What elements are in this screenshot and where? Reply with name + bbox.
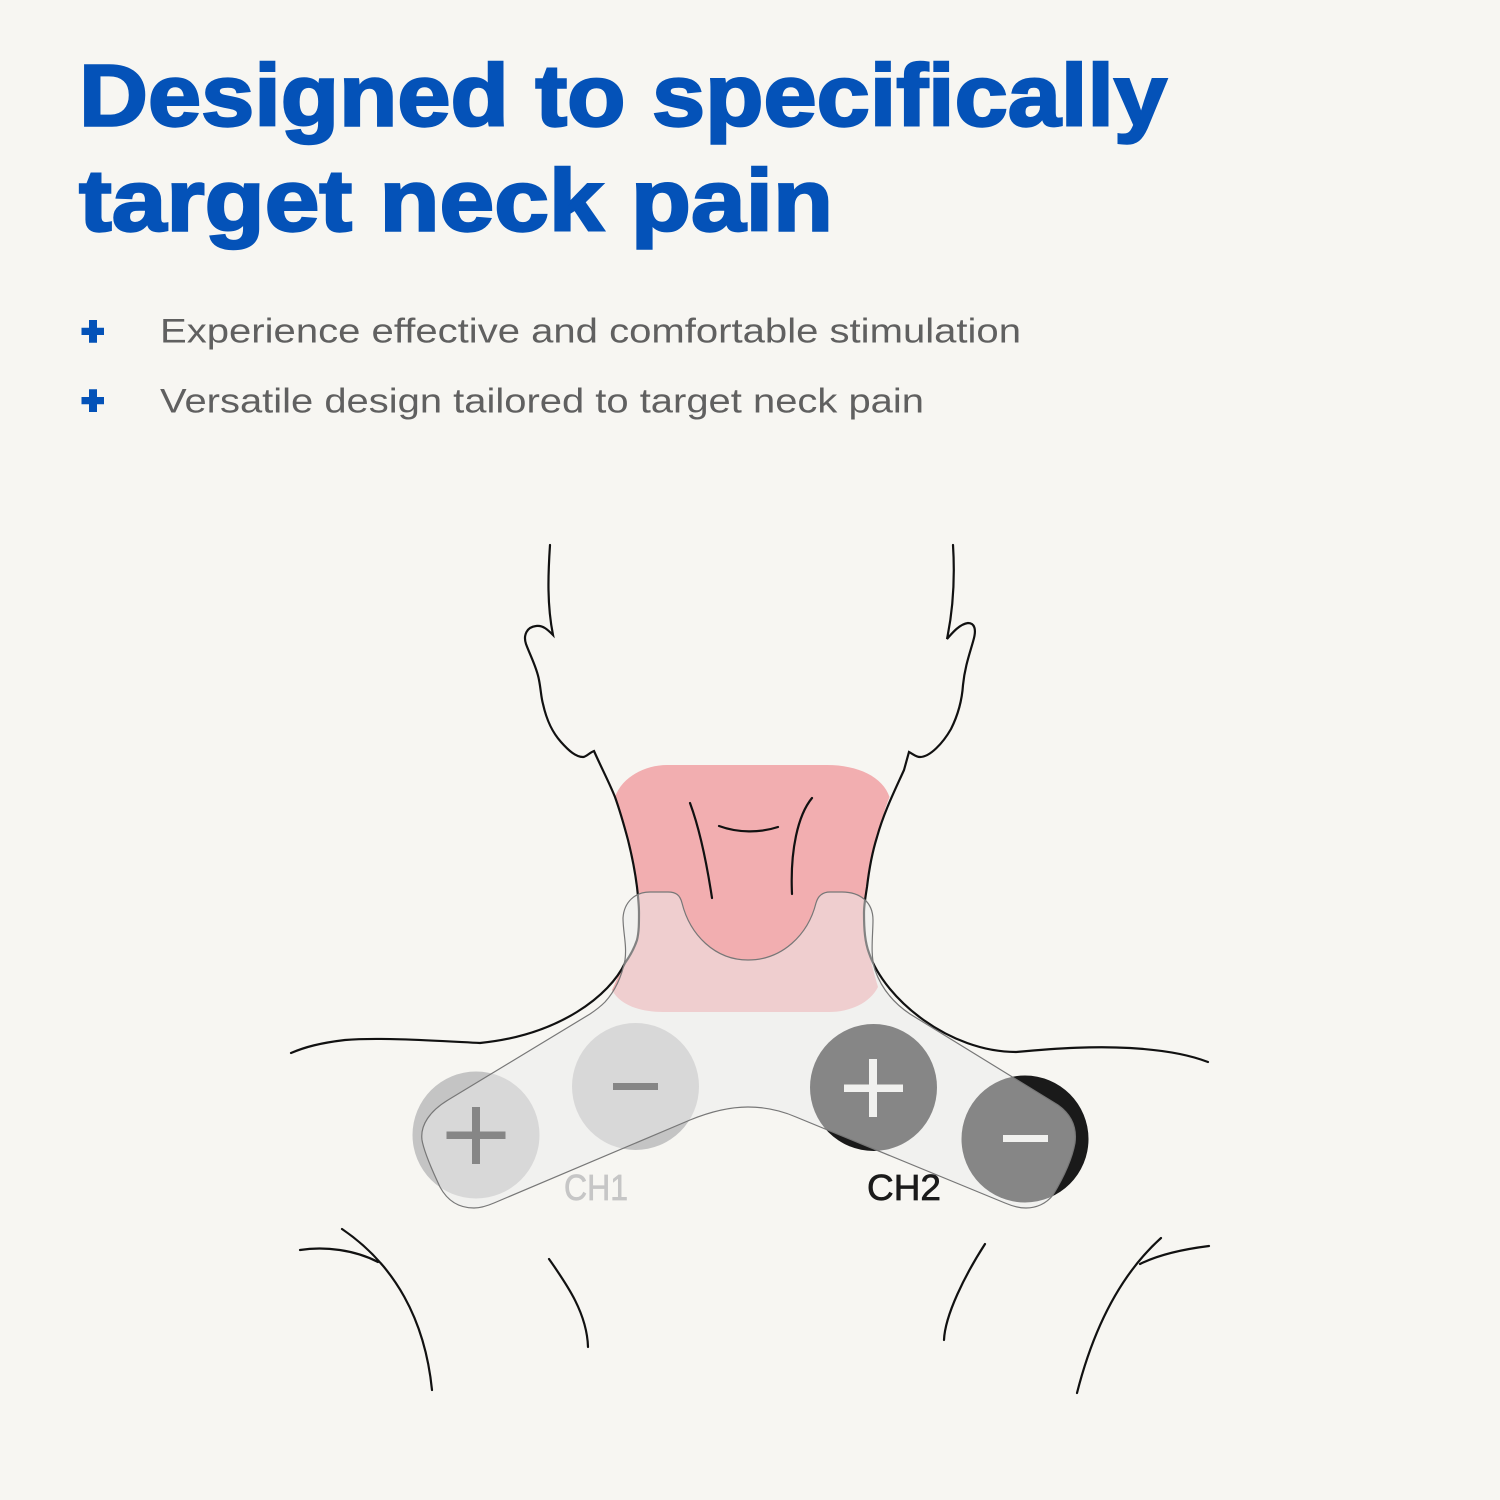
electrode: CH1 minus: [572, 1023, 699, 1150]
left head and neck outline: [291, 545, 639, 1053]
neck diagram: [291, 545, 1209, 1393]
right shoulder lines: [944, 1238, 1209, 1393]
body outline: [291, 545, 1209, 1393]
left neck muscle line: [690, 803, 712, 898]
translucent neck device pad: [422, 892, 1075, 1208]
title: Designed to specifically: [79, 48, 1167, 144]
left shoulder lines: [300, 1229, 588, 1390]
electrode: CH2 plus: [810, 1024, 937, 1151]
electrode channel 1: [412, 1023, 699, 1198]
electrode: CH2 minus: [962, 1076, 1088, 1202]
icon: plus bullet 2: [82, 389, 104, 412]
benefit text 2: Versatile design tailored to target neck pain: [160, 382, 924, 420]
label: CH2: CH2: [867, 1167, 941, 1208]
benefit text 1: Experience effective and comfortable stimulation: [160, 312, 1021, 350]
right head and neck outline: [864, 545, 1208, 1062]
right neck muscle line: [792, 798, 812, 894]
label: CH1: CH1: [564, 1167, 628, 1208]
benefit list: [82, 312, 1021, 420]
collarbone notch line: [719, 826, 778, 831]
icon: plus bullet 1: [82, 320, 104, 343]
highlighted pain area on neck: [612, 765, 890, 1012]
electrode: CH1 plus: [412, 1072, 540, 1198]
electrode channel 2: [810, 1024, 1088, 1202]
title: target neck pain: [79, 152, 833, 250]
title: [79, 48, 1167, 250]
